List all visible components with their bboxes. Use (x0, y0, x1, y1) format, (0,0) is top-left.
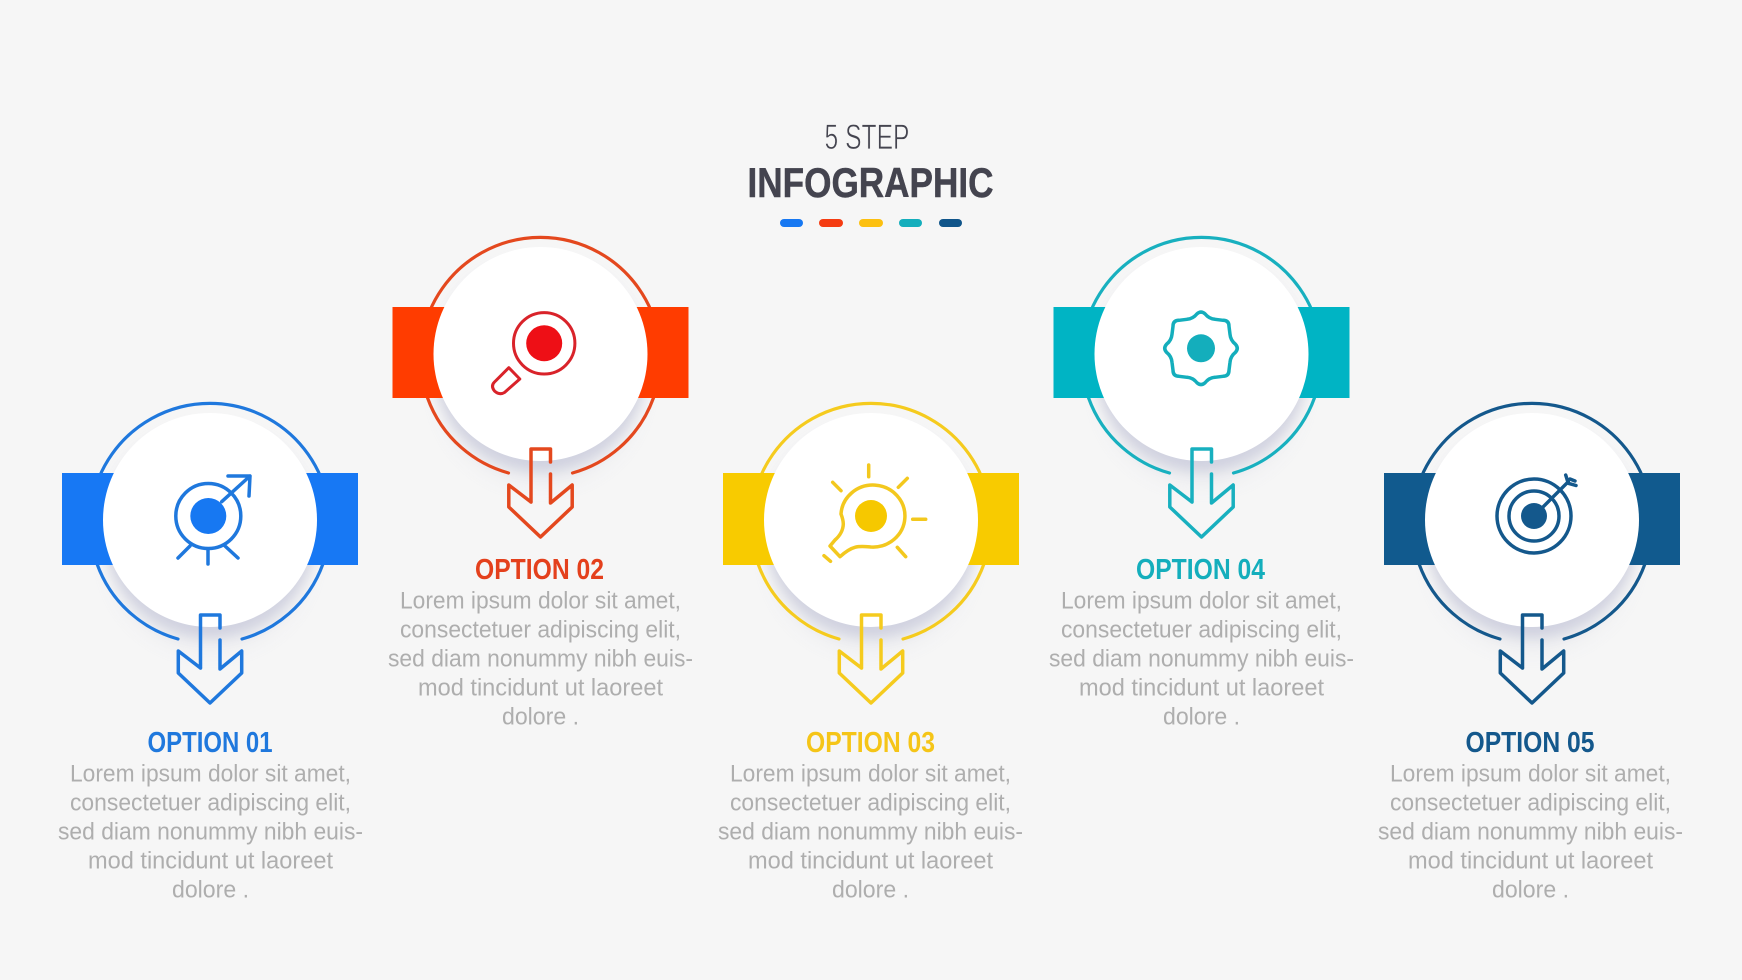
option text (1049, 554, 1354, 730)
heading: OPTION 01 (148, 727, 272, 759)
body: Lorem ipsum dolor sit amet, (1390, 760, 1671, 788)
body: consectetuer adipiscing elit, (70, 790, 351, 816)
ring (90, 403, 330, 639)
ring (1082, 237, 1322, 473)
heading: OPTION 04 (1136, 554, 1265, 586)
option text (388, 554, 693, 730)
body: consectetuer adipiscing elit, (730, 790, 1011, 816)
icon: bullseye target (1497, 475, 1576, 553)
body: sed diam nonummy nibh euis- (718, 818, 1023, 846)
side bars (1054, 307, 1350, 398)
body: Lorem ipsum dolor sit amet, (730, 760, 1011, 788)
body: dolore . (832, 876, 909, 904)
body (718, 760, 1023, 904)
title: 5 STEP: 5 STEP (824, 118, 910, 157)
circle shadow (104, 425, 316, 642)
panel: option 05 (1378, 403, 1683, 904)
ring (420, 237, 660, 473)
body: consectetuer adipiscing elit, (1390, 790, 1671, 816)
body: consectetuer adipiscing elit, (1061, 616, 1342, 644)
icon: target with arrow (176, 476, 250, 564)
body: dolore . (502, 704, 579, 730)
white circle (1425, 413, 1639, 627)
body: sed diam nonummy nibh euis- (1049, 646, 1354, 672)
white circle (103, 413, 317, 627)
down arrow (839, 615, 903, 703)
body: Lorem ipsum dolor sit amet, (1061, 588, 1342, 614)
down arrow (1170, 449, 1233, 537)
side bars (723, 473, 1019, 565)
white circle (1094, 247, 1308, 461)
body: dolore . (1492, 876, 1569, 904)
panel: option 01 (58, 403, 363, 904)
body: mod tincidunt ut laoreet (1079, 674, 1324, 702)
side bars (392, 307, 688, 398)
icon: light bulb (824, 465, 926, 561)
heading: OPTION 03 (806, 727, 935, 759)
body: dolore . (172, 876, 249, 904)
body: dolore . (1163, 704, 1240, 730)
title: INFOGRAPHIC: INFOGRAPHIC (748, 159, 994, 206)
body: Lorem ipsum dolor sit amet, (400, 588, 681, 614)
down arrow (1500, 615, 1564, 703)
icon: gear (1165, 312, 1237, 385)
body: mod tincidunt ut laoreet (1408, 848, 1653, 874)
colour key dots (780, 219, 962, 227)
body: Lorem ipsum dolor sit amet, (70, 760, 351, 788)
circle shadow (1096, 259, 1308, 476)
circle shadow (765, 425, 977, 642)
down arrow (509, 449, 572, 537)
body: sed diam nonummy nibh euis- (58, 818, 363, 846)
body: mod tincidunt ut laoreet (748, 848, 993, 874)
ring (1412, 403, 1652, 639)
ring (751, 403, 991, 639)
side bars (62, 473, 358, 565)
option text (1378, 727, 1683, 904)
panel: option 03 (718, 403, 1023, 904)
body (1378, 760, 1683, 904)
heading: OPTION 02 (475, 554, 604, 586)
panel: option 04 (1049, 237, 1354, 730)
circle shadow (434, 259, 646, 476)
body (58, 760, 363, 904)
body (1049, 588, 1354, 730)
white circle (764, 413, 978, 627)
circle shadow (1426, 425, 1638, 642)
body (388, 588, 693, 730)
body: mod tincidunt ut laoreet (88, 848, 333, 874)
body: mod tincidunt ut laoreet (418, 674, 663, 702)
body: consectetuer adipiscing elit, (400, 616, 681, 644)
heading: OPTION 05 (1466, 727, 1594, 759)
side bars (1384, 473, 1680, 565)
body: sed diam nonummy nibh euis- (1378, 818, 1683, 846)
title block (748, 118, 994, 227)
down arrow (178, 615, 242, 703)
body: sed diam nonummy nibh euis- (388, 646, 693, 672)
white circle (434, 247, 648, 461)
icon: magnifier (492, 313, 575, 394)
option text (718, 727, 1023, 904)
panel: option 02 (388, 237, 693, 730)
option text (58, 727, 363, 904)
